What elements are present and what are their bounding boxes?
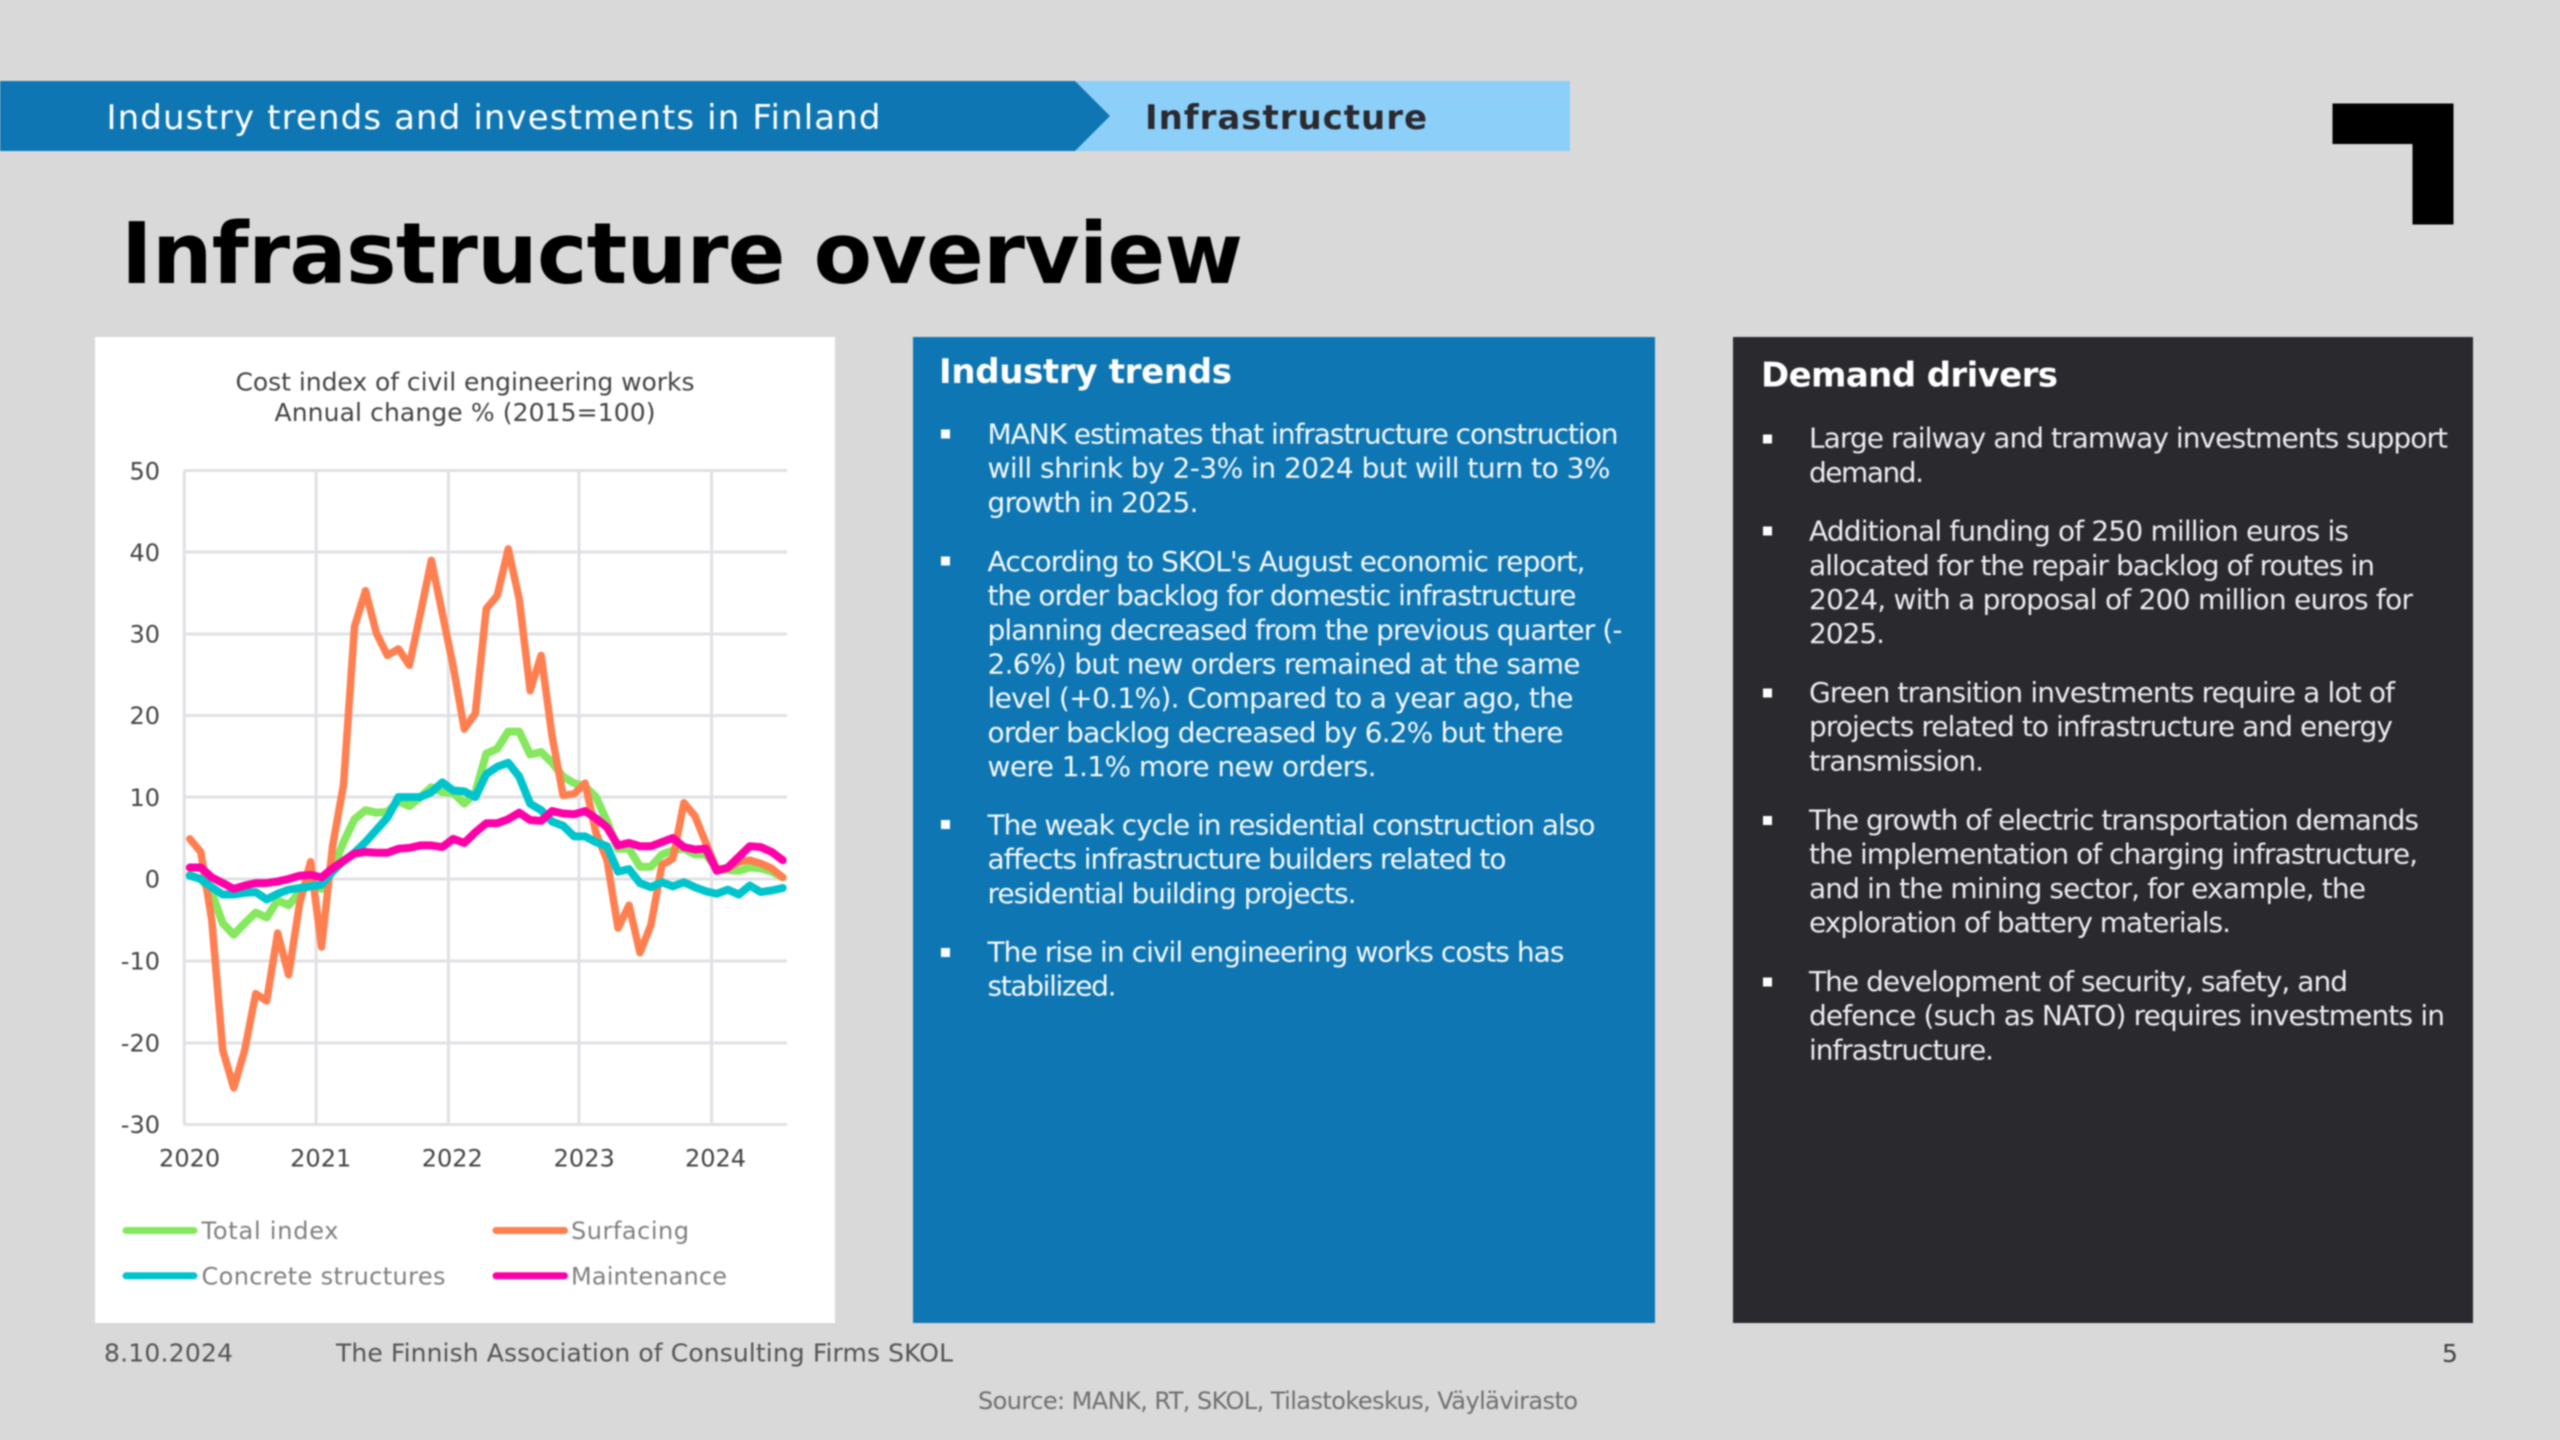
y axis labels: 40 [129, 539, 160, 567]
series: total index [190, 732, 783, 935]
x axis labels: 2020 [159, 1144, 220, 1172]
y axis labels: 50 [129, 458, 160, 486]
bullet: repair funding: 2025. [1809, 617, 1885, 650]
bullet: SKOL report: level (+0.1%). Compared to a year ago, the [988, 682, 1574, 715]
y axis labels: 20 [129, 702, 160, 730]
legend: Concrete structures [202, 1263, 446, 1291]
legend [126, 1217, 727, 1291]
heading: demand drivers: Demand drivers [1761, 356, 2058, 396]
bullet: repair funding: 2024, with a proposal of 200 million euros for [1809, 583, 2413, 616]
bullet: green transition: transmission. [1809, 744, 1984, 777]
x axis labels: 2023 [554, 1144, 615, 1172]
bullet: SKOL report: the order backlog for domestic infrastructure [988, 579, 1576, 612]
bullet: repair funding: allocated for the repair backlog of routes in [1809, 549, 2375, 582]
bullet: security and defence: infrastructure. [1809, 1033, 1994, 1066]
y axis labels: -20 [121, 1030, 160, 1058]
bullet: green transition: projects related to infrastructure and energy [1809, 710, 2393, 743]
bullet: security and defence: The development of security, safety, and [1808, 965, 2348, 998]
bullet: SKOL report: were 1.1% more new orders. [988, 750, 1376, 783]
bullet: repair funding [1763, 515, 2413, 650]
panel: industry trends [913, 337, 1655, 1323]
bullet: repair funding: Additional funding of 250 million euros is [1809, 515, 2349, 548]
y axis labels: 10 [129, 784, 160, 812]
bullet: cost stabilised: stabilized. [988, 970, 1116, 1003]
bullet: electric transport: and in the mining sector, for example, the [1809, 872, 2366, 905]
series: surfacing [190, 549, 783, 1088]
series: maintenance [190, 811, 783, 889]
x axis labels: 2022 [422, 1144, 483, 1172]
legend: Surfacing [571, 1217, 689, 1245]
chart title: Cost index of civil engineering works [236, 368, 694, 396]
footer: source: Source: MANK, RT, SKOL, Tilastokeskus, Väylävirasto [978, 1387, 1578, 1415]
chart title [236, 368, 694, 427]
icon: corner logo [2332, 104, 2454, 224]
y axis labels: 0 [145, 866, 160, 894]
bullet: green transition: Green transition investments require a lot of [1809, 676, 2396, 709]
panel: demand drivers [1733, 337, 2473, 1323]
bullet: cost stabilised [941, 936, 1564, 1003]
bullet: SKOL report: According to SKOL's August economic report, [988, 545, 1586, 578]
heading: industry trends: Industry trends [939, 352, 1232, 392]
bullet: electric transport: the implementation of charging infrastructure, [1809, 838, 2418, 871]
y axis labels: -10 [121, 948, 160, 976]
line chart [121, 458, 787, 1172]
bullet: residential cycle: affects infrastructure builders related to [988, 843, 1506, 876]
bullet: electric transport: exploration of battery materials. [1809, 906, 2231, 939]
footer: page number: 5 [2442, 1339, 2458, 1368]
legend: Maintenance [571, 1263, 727, 1291]
x axis labels [159, 1144, 746, 1172]
footer: organisation: The Finnish Association of Consulting Firms SKOL [335, 1338, 953, 1368]
title: Infrastructure overview [121, 205, 1243, 304]
banner title: topic: Infrastructure [1145, 98, 1427, 138]
footer: date: 8.10.2024 [104, 1338, 233, 1368]
bullet: MANK estimate: MANK estimates that infrastructure construction [988, 418, 1618, 450]
bullet: SKOL report [941, 545, 1622, 783]
bullet: residential cycle [941, 808, 1596, 910]
y axis labels: -30 [121, 1111, 160, 1139]
bullet: residential cycle: residential building projects. [988, 877, 1356, 910]
x axis labels: 2024 [685, 1144, 746, 1172]
bullet: railway: demand. [1809, 456, 1924, 489]
bullet: MANK estimate: growth in 2025. [988, 486, 1198, 519]
bullet: MANK estimate: will shrink by 2-3% in 2024 but will turn to 3% [988, 452, 1610, 485]
legend: Total index [200, 1217, 338, 1245]
bullet: MANK estimate [941, 418, 1618, 519]
bullet: cost stabilised: The rise in civil engineering works costs has [986, 936, 1564, 968]
series: concrete structures [190, 763, 783, 899]
x axis labels: 2021 [290, 1144, 351, 1172]
bullet: residential cycle: The weak cycle in residential construction also [986, 808, 1596, 842]
data series [190, 549, 783, 1088]
bullet: SKOL report: order backlog decreased by 6.2% but there [988, 716, 1564, 749]
bullet: green transition [1763, 676, 2396, 777]
y axis labels: 30 [129, 620, 160, 648]
chart title: Annual change % (2015=100) [274, 398, 656, 427]
bullet: electric transport [1763, 804, 2419, 939]
bullet: SKOL report: planning decreased from the previous quarter (- [988, 613, 1622, 646]
bullet: security and defence: defence (such as NATO) requires investments in [1809, 999, 2445, 1032]
panel: chart [95, 337, 835, 1323]
bullet: SKOL report: 2.6%) but new orders remained at the same [988, 648, 1580, 680]
bullet: railway [1763, 422, 2448, 489]
banner title: section: Industry trends and investments in Finland [106, 98, 880, 138]
bullet: railway: Large railway and tramway investments support [1809, 422, 2448, 455]
bullet: electric transport: The growth of electric transportation demands [1808, 804, 2419, 836]
y axis labels [121, 458, 160, 1139]
bullet: security and defence [1763, 965, 2445, 1066]
header banner [0, 81, 1570, 151]
